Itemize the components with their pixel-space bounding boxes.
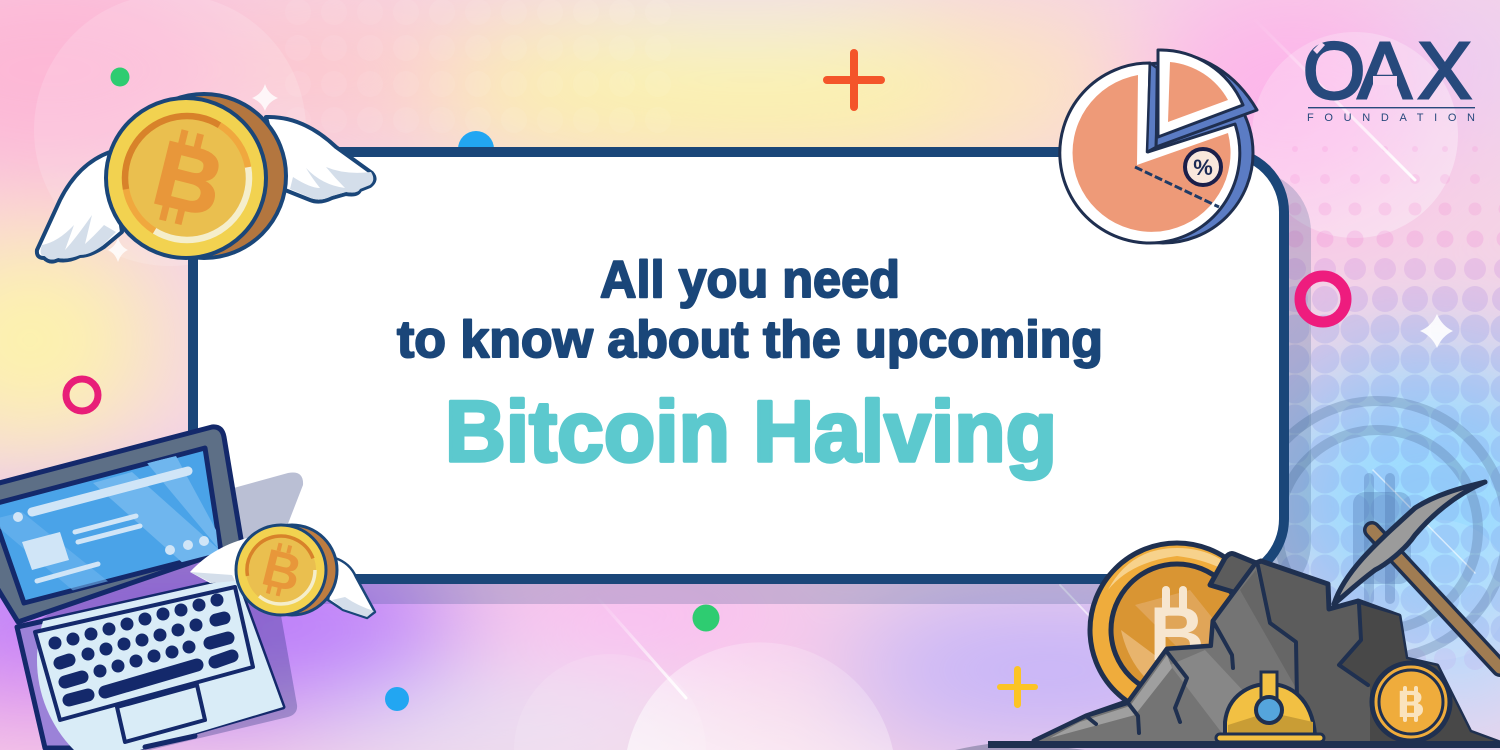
pie orange fill [1073, 75, 1231, 232]
laptop trackpad [117, 685, 205, 742]
pie depth [1073, 63, 1253, 243]
halftone dot pattern [280, 0, 1500, 674]
percent badge [1185, 149, 1221, 185]
ring: pink right [1300, 276, 1346, 322]
laptop base [17, 578, 283, 748]
coin ring arcs [102, 93, 272, 263]
logo: OAX Foundation [1303, 26, 1475, 124]
rock main [1034, 561, 1500, 745]
title block [397, 251, 1103, 480]
laptop keyboard [35, 587, 253, 720]
coin face [106, 98, 266, 258]
laptop notch [145, 736, 195, 747]
laptop lid [0, 427, 242, 622]
icon: small winged bitcoin coin [190, 525, 375, 618]
plus: orange [823, 49, 885, 111]
laptop screen [0, 448, 225, 605]
heading line 2: to know about the upcoming [397, 311, 1103, 369]
slice depth left [1147, 63, 1157, 152]
icon: laptop [0, 427, 303, 750]
rock cracks [1034, 563, 1368, 741]
laptop shadow [40, 472, 303, 750]
small right wing [328, 558, 375, 618]
small coin: B [1397, 684, 1425, 726]
small coin face [236, 525, 326, 615]
bitcoin symbol: B [144, 122, 233, 237]
pickaxe [1334, 482, 1500, 668]
dot: blue bottom [385, 687, 409, 711]
slice depth right [1156, 50, 1257, 147]
dot: green top left [110, 68, 130, 86]
icon: pie chart [1060, 50, 1257, 243]
ground shadow [955, 742, 1085, 750]
rock front [1034, 563, 1297, 741]
panel shadow [210, 170, 1311, 604]
coin back [122, 94, 286, 258]
logo wordmark: OAX [1303, 26, 1471, 115]
logo cutouts [1313, 42, 1397, 85]
small left wing [190, 538, 247, 583]
ring: pink left [66, 379, 98, 411]
mining helmet [1216, 672, 1324, 742]
main white panel [193, 152, 1284, 579]
small bitcoin symbol: B [256, 539, 307, 604]
plus: yellow [997, 666, 1038, 708]
background shooting lines [596, 18, 1475, 698]
large coin symbol: B [1150, 592, 1204, 677]
dashed line [1135, 167, 1219, 207]
heading line 1: All you need [600, 251, 900, 309]
ground line [988, 741, 1500, 748]
logo subtitle: FOUNDATION [1307, 112, 1475, 124]
rock right shade [1339, 604, 1500, 743]
logo rule [1308, 107, 1475, 108]
large coin [1090, 543, 1264, 717]
icon: winged bitcoin coin [37, 93, 375, 263]
pie body [1060, 63, 1240, 243]
dot: green bottom [692, 604, 720, 632]
background coin rings [1249, 401, 1500, 659]
icon: mining pile [955, 482, 1500, 750]
small coin [1372, 663, 1450, 741]
dot: blue behind panel [458, 131, 494, 167]
sparkles [108, 84, 1453, 530]
heading highlight: Bitcoin Halving [445, 384, 1057, 480]
right wing [266, 117, 375, 202]
percent badge: % [1193, 155, 1213, 180]
left wing [37, 152, 122, 262]
rock back ridge [1210, 554, 1260, 600]
pie slice [1158, 50, 1243, 137]
small coin back [247, 525, 337, 615]
